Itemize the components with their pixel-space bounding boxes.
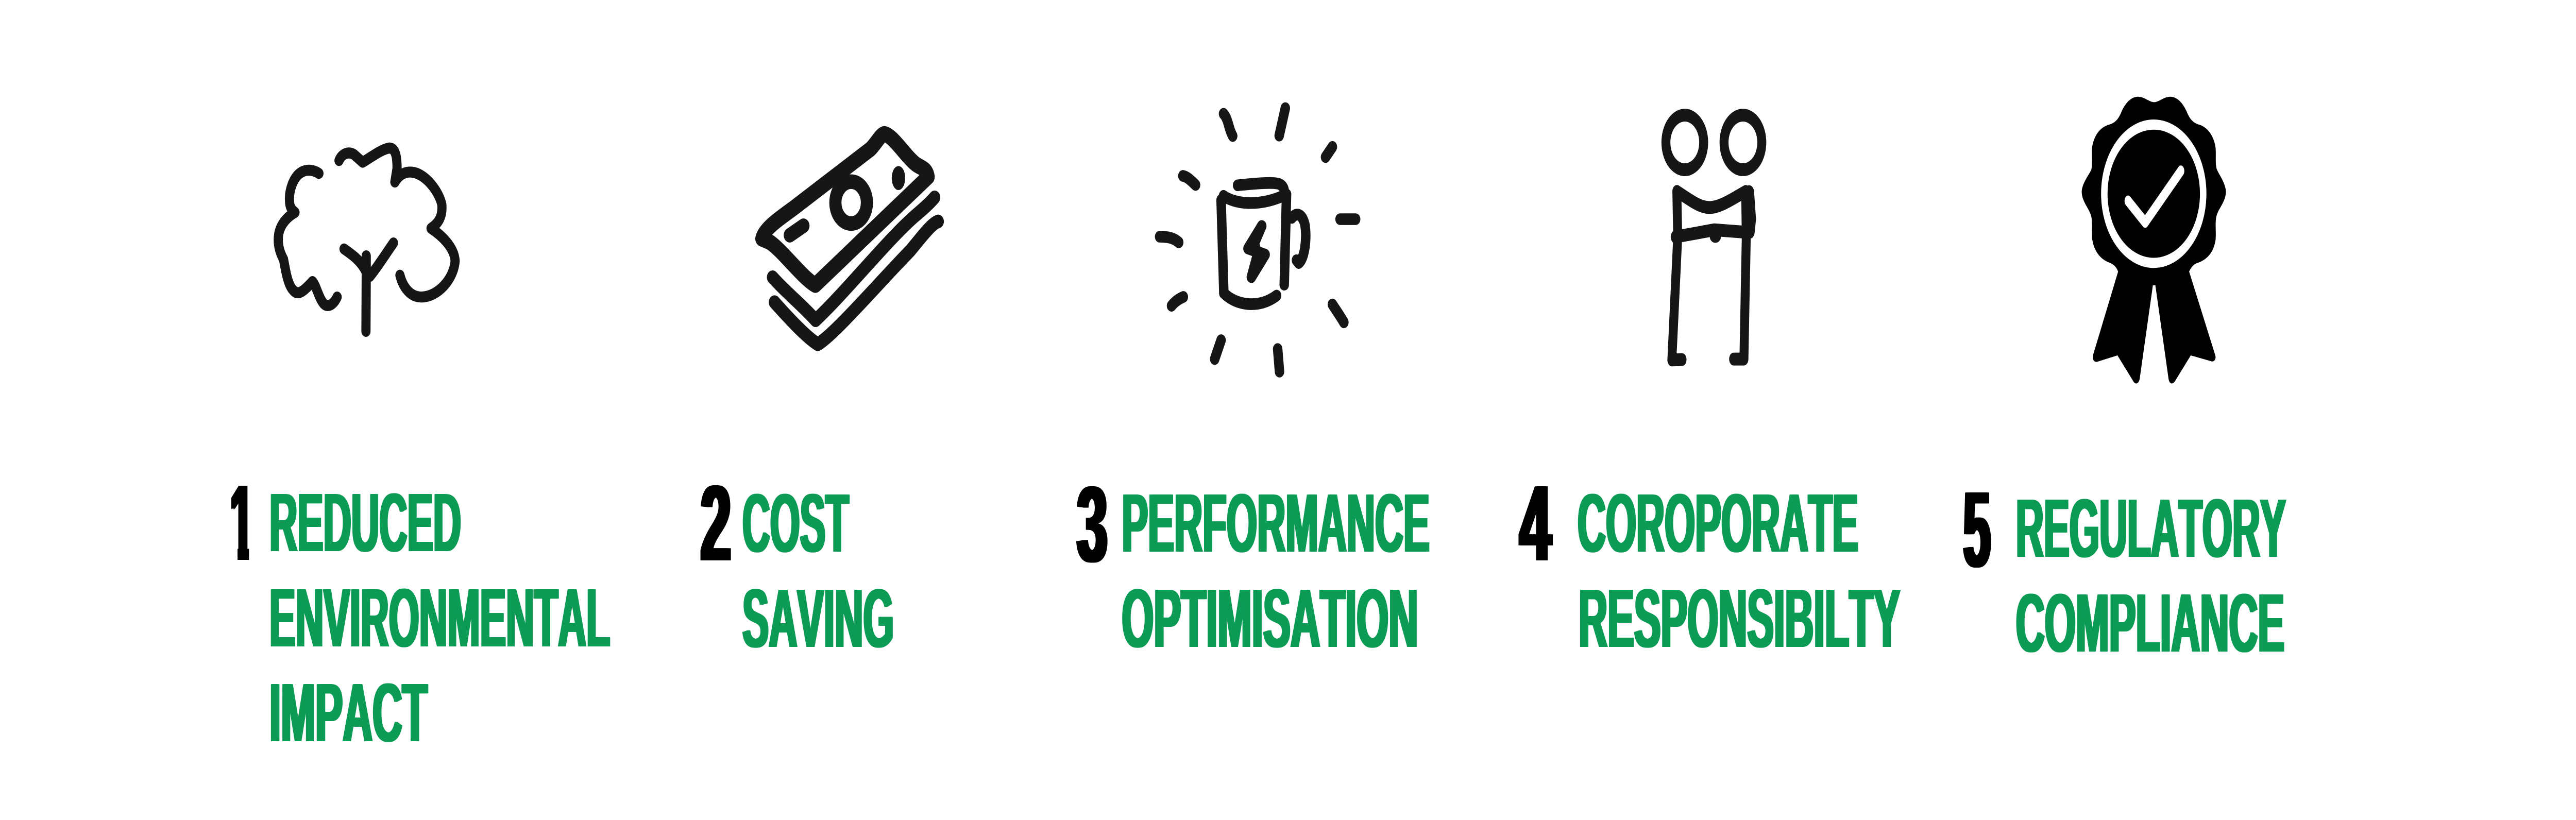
icon detail: lightning bolt bbox=[1248, 226, 1265, 277]
panel: regulatory compliance bbox=[1963, 97, 2286, 670]
icon detail: mug body bbox=[1221, 183, 1306, 304]
panel: cost saving bbox=[701, 126, 944, 665]
label: reduced environmental impact: REDUCED bbox=[269, 476, 461, 569]
label: cost saving: SAVING bbox=[742, 572, 894, 665]
number 3: 3 bbox=[1077, 465, 1107, 585]
icon: rosette badge with check mark bbox=[2081, 97, 2226, 383]
label: corporate responsibility: COROPORATE bbox=[1578, 477, 1858, 570]
number 2: 2 bbox=[701, 464, 731, 584]
label: reduced environmental impact bbox=[269, 476, 610, 759]
icon: tree bbox=[274, 142, 460, 337]
infographic canvas bbox=[231, 97, 2286, 742]
icon: mug with lightning bolt bbox=[1155, 102, 1360, 378]
icon: stack of banknotes bbox=[755, 126, 944, 351]
number 4: 4 bbox=[1520, 464, 1551, 584]
label: cost saving bbox=[742, 477, 894, 665]
label: performance optimisation bbox=[1122, 477, 1430, 665]
label: reduced environmental impact: IMPACT bbox=[269, 667, 428, 759]
number 1: 1 bbox=[230, 463, 254, 583]
label: reduced environmental impact: ENVIRONMENTAL bbox=[269, 572, 610, 664]
icon: two people shaking hands bbox=[1661, 109, 1766, 367]
panel: reduced environmental impact bbox=[231, 142, 610, 759]
label: regulatory compliance bbox=[2016, 482, 2286, 670]
label: performance optimisation: PERFORMANCE bbox=[1122, 477, 1430, 570]
panel: corporate responsibility bbox=[1518, 109, 1901, 665]
label: regulatory compliance: REGULATORY bbox=[2016, 482, 2286, 575]
panel: performance optimisation bbox=[1076, 102, 1430, 665]
label: cost saving: COST bbox=[742, 477, 849, 570]
label: corporate responsibility bbox=[1578, 477, 1901, 665]
label: corporate responsibility: RESPONSIBILTY bbox=[1579, 572, 1900, 665]
number 5: 5 bbox=[1963, 470, 1991, 590]
label: regulatory compliance: COMPLIANCE bbox=[2016, 577, 2284, 670]
icon detail: radiating rays bbox=[1160, 108, 1355, 371]
label: performance optimisation: OPTIMISATION bbox=[1122, 572, 1418, 665]
